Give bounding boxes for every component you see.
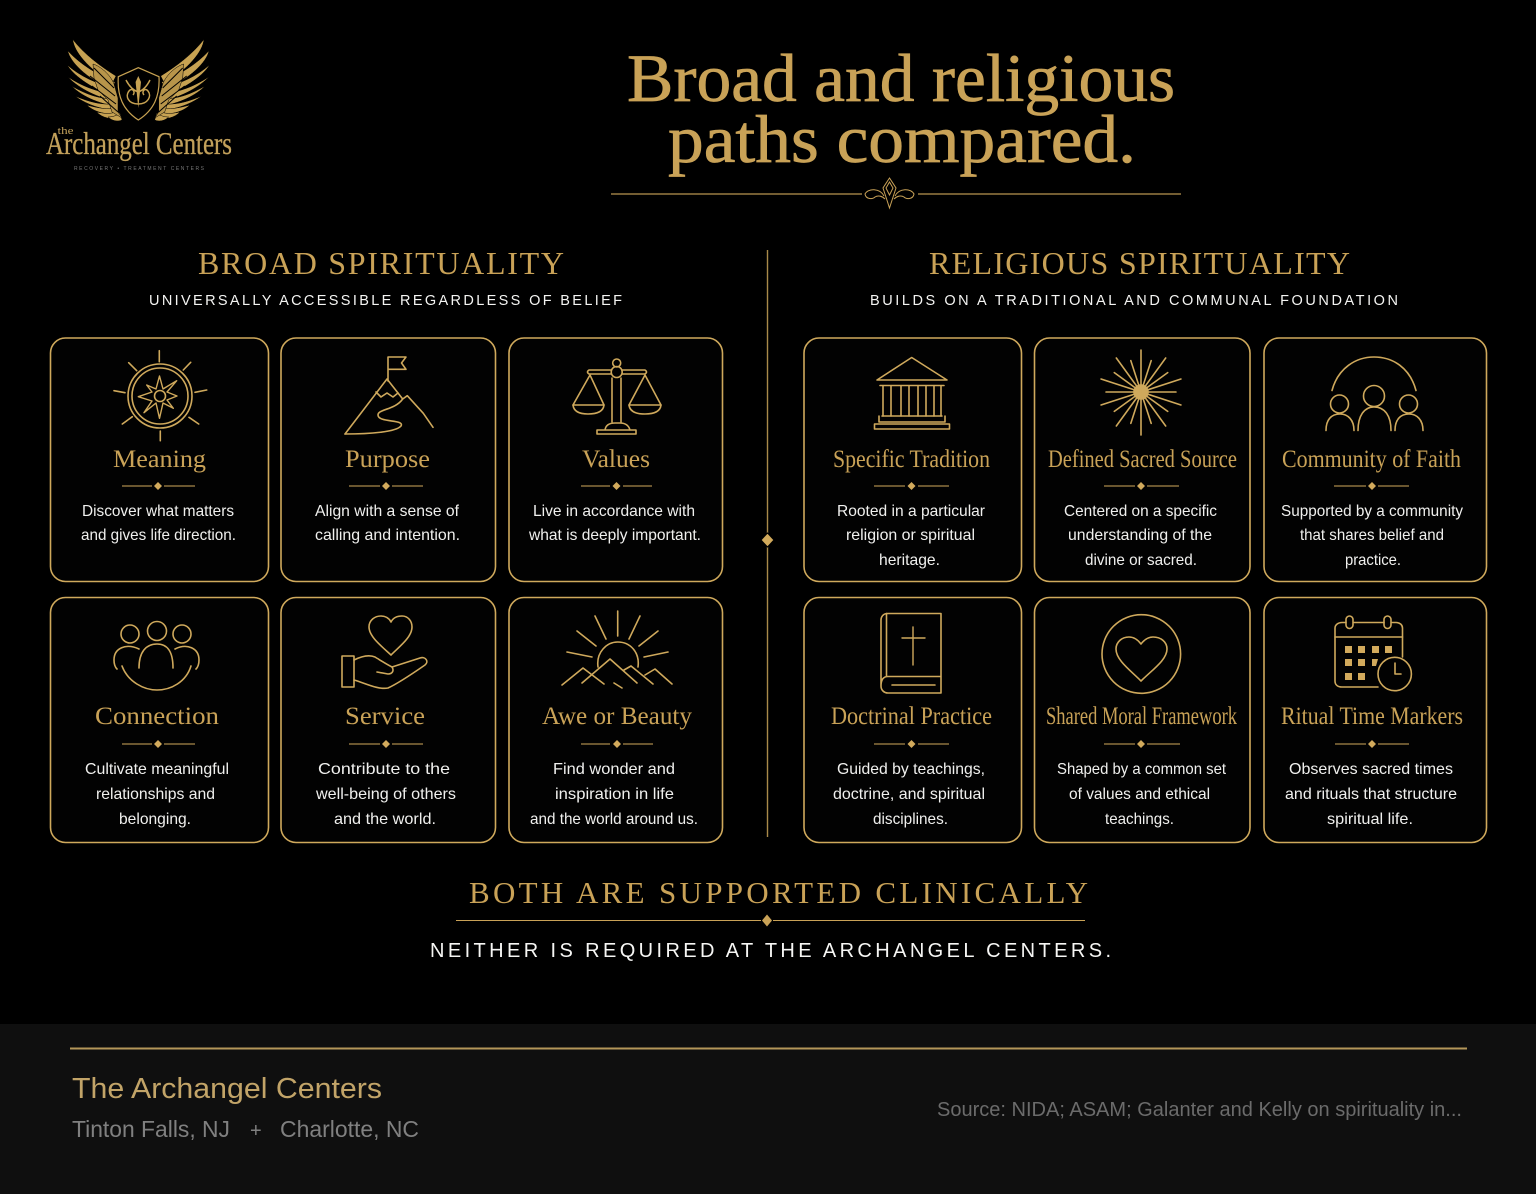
ornament divider [349, 740, 423, 748]
panel: Doctrinal Practice [804, 598, 1022, 842]
card description: and the world. [334, 811, 436, 828]
callout: both are supported clinically [430, 875, 1111, 962]
icon: heart in circle [1102, 615, 1181, 693]
callout subtext: NEITHER IS REQUIRED AT THE ARCHANGEL CENTERS. [430, 940, 1111, 962]
card description: and the world around us. [530, 811, 698, 828]
card title: Purpose [345, 446, 430, 473]
ornament divider [1334, 482, 1409, 490]
card description [1285, 761, 1457, 828]
card description: Guided by teachings, [837, 761, 985, 778]
ornament divider [1104, 482, 1179, 490]
card description: that shares belief and [1300, 527, 1444, 544]
panel: Purpose [281, 338, 496, 582]
card description: of values and ethical [1069, 786, 1210, 803]
logo: The Archangel Centers [46, 39, 232, 172]
card description [837, 503, 986, 569]
logo wordmark: the [58, 125, 74, 137]
card description: religion or spiritual [846, 527, 975, 544]
card description: Observes sacred times [1289, 761, 1453, 778]
logo wordmark [46, 125, 232, 172]
card description: inspiration in life [555, 786, 674, 803]
ornament divider [122, 482, 195, 490]
card description [315, 761, 456, 828]
card description [1057, 761, 1227, 828]
card description [85, 761, 229, 828]
card description: Shaped by a common set [1057, 761, 1227, 778]
footer source note: Source: NIDA; ASAM; Galanter and Kelly on spirituality in... [937, 1099, 1462, 1121]
calendar day squares [1345, 646, 1392, 680]
panel: Values [509, 338, 722, 582]
card description: divine or sacred. [1085, 552, 1197, 569]
ornament divider [874, 740, 949, 748]
card title: Specific Tradition [833, 446, 990, 473]
card description: Discover what matters [82, 503, 234, 520]
card title: Values [582, 446, 650, 473]
panel: Meaning [50, 338, 268, 582]
card description: Live in accordance with [533, 503, 695, 520]
card description [1281, 503, 1463, 569]
logo wordmark: RECOVERY • TREATMENT CENTERS [74, 166, 205, 172]
card description: and gives life direction. [81, 527, 236, 544]
icon: holy book with cross [881, 614, 941, 693]
card title: Community of Faith [1282, 446, 1461, 473]
card title: Doctrinal Practice [831, 703, 992, 730]
card title: Meaning [113, 446, 207, 473]
card description: Find wonder and [553, 761, 675, 778]
icon: left wing [67, 39, 122, 121]
card description [528, 503, 701, 544]
card title: Defined Sacred Source [1048, 446, 1237, 473]
ornament divider [874, 482, 949, 490]
icon: balance scale [573, 359, 661, 434]
ornament divider [122, 740, 195, 748]
ornament divider [581, 482, 652, 490]
icon: mountain with flag [345, 357, 433, 434]
center vertical divider [761, 250, 774, 837]
panel: Ritual Time Markers [1264, 598, 1486, 842]
heading: broad spirituality: BROAD SPIRITUALITY [198, 245, 564, 281]
title [627, 40, 1175, 177]
card description: doctrine, and spiritual [833, 786, 985, 803]
icon: right wing [155, 39, 209, 121]
card description: practice. [1345, 552, 1401, 569]
panel: Awe or Beauty [509, 598, 722, 842]
card description [1064, 503, 1217, 569]
card description: Contribute to the [318, 761, 450, 778]
heading: broad spirituality [149, 245, 622, 309]
card description [81, 503, 236, 544]
panel: Service [281, 598, 496, 842]
card description [315, 503, 460, 544]
card description: calling and intention. [315, 527, 460, 544]
ornament divider [349, 482, 423, 490]
callout divider [456, 914, 1085, 926]
card description: Centered on a specific [1064, 503, 1217, 520]
icon: three people connected [114, 622, 199, 690]
footer [0, 1024, 1536, 1194]
title divider with ornament [611, 178, 1181, 208]
icon: radiant star burst [1101, 350, 1181, 435]
icon: shield crest [118, 68, 159, 120]
panel: Shared Moral Framework [1034, 598, 1250, 842]
card description [530, 761, 698, 828]
card title: Awe or Beauty [542, 703, 692, 730]
logo wordmark: Archangel Centers [46, 125, 232, 161]
card title: Connection [95, 703, 220, 730]
card description: spiritual life. [1327, 811, 1413, 828]
card description: Supported by a community [1281, 503, 1463, 520]
card title: Service [345, 703, 425, 730]
card description: what is deeply important. [528, 527, 701, 544]
card title: Ritual Time Markers [1281, 703, 1463, 730]
footer locations [72, 1116, 419, 1142]
card description: disciplines. [873, 811, 948, 828]
card description: Align with a sense of [315, 503, 460, 520]
ornament divider [1104, 740, 1180, 748]
card description: well-being of others [315, 786, 456, 803]
card description: teachings. [1105, 811, 1174, 828]
ornament divider [1335, 740, 1409, 748]
footer brand name: The Archangel Centers [72, 1073, 382, 1105]
footer locations: Charlotte, NC [280, 1116, 419, 1142]
callout: both are supported clinically: BOTH ARE SUPPORTED CLINICALLY [469, 875, 1088, 910]
card description: Cultivate meaningful [85, 761, 229, 778]
card description: understanding of the [1068, 527, 1212, 544]
heading: religious spirituality: RELIGIOUS SPIRITUALITY [929, 245, 1350, 281]
heading: religious spirituality [870, 245, 1398, 309]
icon: hand holding heart [342, 616, 427, 688]
title: Broad and religious [627, 40, 1175, 116]
panel: Connection [50, 598, 268, 842]
icon: temple [874, 358, 950, 429]
subheading: religious spirituality: BUILDS ON A TRADITIONAL AND COMMUNAL FOUNDATION [870, 293, 1398, 309]
card description: belonging. [119, 811, 191, 828]
icon: community under arch [1326, 357, 1423, 430]
icon: sun over mountains [562, 611, 672, 688]
icon: calendar with clock [1335, 616, 1411, 691]
footer locations: + [250, 1120, 262, 1142]
card title: Shared Moral Framework [1046, 703, 1237, 730]
footer locations: Tinton Falls, NJ [72, 1116, 230, 1142]
panel: Community of Faith [1264, 338, 1486, 582]
panel: Specific Tradition [804, 338, 1022, 582]
icon: compass [114, 351, 207, 441]
card description: Rooted in a particular [837, 503, 986, 520]
card description [833, 761, 985, 828]
title: paths compared. [668, 101, 1136, 177]
card description: and rituals that structure [1285, 786, 1457, 803]
card description: heritage. [879, 552, 940, 569]
card description: relationships and [96, 786, 215, 803]
subheading: broad spirituality: UNIVERSALLY ACCESSIBLE REGARDLESS OF BELIEF [149, 293, 622, 309]
ornament divider [581, 740, 653, 748]
panel: Defined Sacred Source [1034, 338, 1250, 582]
